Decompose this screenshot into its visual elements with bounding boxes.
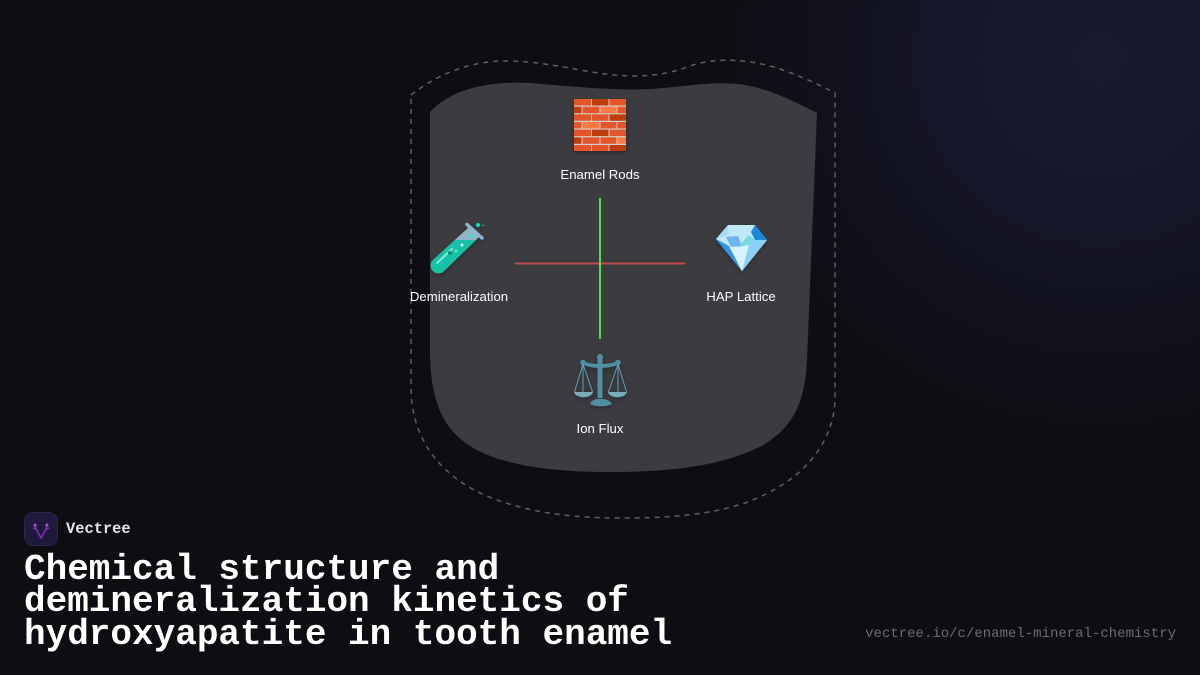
title: Chemical structure and bbox=[24, 549, 499, 590]
title: hydroxyapatite in tooth enamel bbox=[24, 614, 672, 655]
title: demineralization kinetics of bbox=[24, 581, 629, 622]
label: Ion Flux: Ion Flux bbox=[577, 421, 623, 436]
icon: brick wall bbox=[574, 99, 626, 151]
label: Demineralization: Demineralization bbox=[410, 289, 508, 304]
icon: balance scales bbox=[574, 354, 627, 406]
icon: test tube bbox=[431, 223, 484, 273]
icon: gem bbox=[716, 225, 767, 271]
source url: vectree.io/c/enamel-mineral-chemistry bbox=[865, 626, 1176, 642]
label: HAP Lattice: HAP Lattice bbox=[706, 289, 776, 304]
label: Enamel Rods: Enamel Rods bbox=[560, 167, 640, 182]
logo icon bbox=[24, 512, 58, 546]
vertical axis bbox=[599, 198, 601, 339]
enamel shape bbox=[430, 83, 817, 472]
title bbox=[24, 549, 672, 655]
horizontal axis bbox=[515, 262, 685, 264]
brand name: Vectree bbox=[66, 520, 131, 538]
dashed outer boundary bbox=[411, 60, 835, 518]
